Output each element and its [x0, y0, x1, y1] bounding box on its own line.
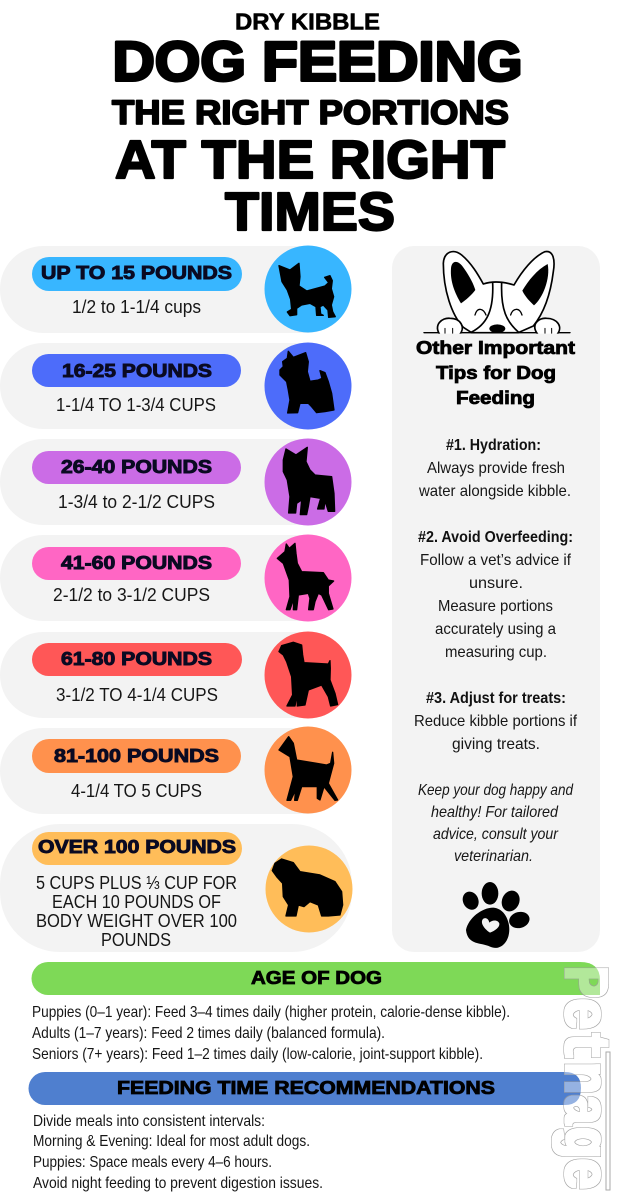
- text block: avoid overfeeding: Measure portions: [438, 598, 553, 615]
- title: THE RIGHT PORTIONS: [112, 94, 509, 132]
- panel: 41-60 pounds: [0, 534, 352, 622]
- text block: avoid overfeeding: [418, 529, 573, 661]
- text block: hydration: Always provide fresh: [427, 460, 565, 477]
- panel: up to 15 pounds: 1/2 to 1-1/4 cups: [72, 296, 201, 317]
- panel: over 100 pounds: EACH 10 POUNDS OF: [52, 891, 221, 912]
- text block: avoid overfeeding: accurately using a: [435, 621, 556, 638]
- text block: adjust for treats: [414, 690, 578, 753]
- panel: up to 15 pounds: [0, 246, 352, 333]
- panel: 61-80 pounds: 61-80 POUNDS: [61, 649, 212, 669]
- text block: age guidance: Seniors (7+ years): Feed 1–2 times daily (low-calorie, joint-support kibble).: [32, 1046, 483, 1063]
- panel: up to 15 pounds: UP TO 15 POUNDS: [41, 263, 232, 283]
- text block: hydration: water alongside kibble.: [418, 483, 571, 500]
- banner: age of dog: [32, 962, 600, 995]
- panel: 26-40 pounds: 1-3/4 to 2-1/2 CUPS: [58, 491, 215, 512]
- banner: age of dog: AGE OF DOG: [251, 968, 382, 988]
- title: TIMES: [225, 182, 395, 242]
- panel: 61-80 pounds: 3-1/2 TO 4-1/4 CUPS: [56, 684, 218, 705]
- heading: tips: Tips for Dog: [436, 363, 556, 383]
- panel: over 100 pounds: [0, 824, 352, 952]
- text block: closing note: advice, consult your: [433, 826, 559, 843]
- panel: 81-100 pounds: [0, 726, 352, 814]
- text block: hydration: [418, 437, 571, 500]
- text block: adjust for treats: Reduce kibble portions if: [414, 713, 578, 730]
- text block: avoid overfeeding: #2. Avoid Overfeeding:: [418, 529, 573, 546]
- text block: age guidance: Adults (1–7 years): Feed 2 times daily (balanced formula).: [32, 1025, 385, 1042]
- text block: age guidance: [32, 1004, 510, 1063]
- banner: feeding time recommendations: [28, 1072, 581, 1105]
- title: DRY KIBBLE: [235, 9, 380, 35]
- title: DOG FEEDING: [112, 30, 522, 92]
- text block: age guidance: Puppies (0–1 year): Feed 3–4 times daily (higher protein, calorie-dense kibble).: [32, 1004, 510, 1021]
- panel: over 100 pounds: POUNDS: [101, 929, 171, 950]
- panel: 41-60 pounds: 2-1/2 to 3-1/2 CUPS: [53, 584, 210, 605]
- title: AT THE RIGHT: [115, 130, 505, 190]
- panel: 26-40 pounds: 26-40 POUNDS: [61, 457, 212, 477]
- panel: 16-25 pounds: 1-1/4 TO 1-3/4 CUPS: [56, 394, 216, 415]
- text block: avoid overfeeding: unsure.: [469, 575, 523, 592]
- icon: peeking dog: [423, 251, 573, 337]
- panel: 81-100 pounds: 4-1/4 TO 5 CUPS: [71, 780, 202, 801]
- panel: over 100 pounds: BODY WEIGHT OVER 100: [36, 910, 237, 931]
- panel: 61-80 pounds: [0, 632, 352, 718]
- text block: hydration: #1. Hydration:: [446, 437, 541, 454]
- panel: 41-60 pounds: 41-60 POUNDS: [61, 553, 212, 573]
- text block: feeding times: [33, 1113, 323, 1192]
- text block: feeding times: Morning & Evening: Ideal for most adult dogs.: [33, 1133, 310, 1150]
- panel: over 100 pounds: OVER 100 POUNDS: [38, 837, 236, 857]
- banner: feeding time recommendations: FEEDING TIME RECOMMENDATIONS: [117, 1078, 495, 1098]
- panel: over 100 pounds: 5 CUPS PLUS ⅓ CUP FOR: [36, 872, 237, 893]
- text block: closing note: Keep your dog happy and: [418, 782, 574, 799]
- text block: adjust for treats: #3. Adjust for treats:: [426, 690, 566, 707]
- text block: adjust for treats: giving treats.: [452, 736, 540, 753]
- panel: 81-100 pounds: 81-100 POUNDS: [54, 746, 219, 766]
- panel: 16-25 pounds: 16-25 POUNDS: [62, 361, 212, 381]
- text block: closing note: [418, 782, 574, 865]
- text block: closing note: healthy! For tailored: [431, 804, 559, 821]
- text block: feeding times: Avoid night feeding to prevent digestion issues.: [33, 1175, 323, 1192]
- icon: paw with heart: [460, 882, 531, 948]
- title: [112, 9, 522, 242]
- text block: avoid overfeeding: measuring cup.: [445, 644, 547, 661]
- text block: closing note: veterinarian.: [454, 848, 533, 865]
- heading: tips: [416, 338, 575, 408]
- text block: avoid overfeeding: Follow a vet’s advice if: [420, 552, 572, 569]
- panel: 16-25 pounds: [0, 342, 352, 430]
- text block: feeding times: Divide meals into consistent intervals:: [33, 1113, 265, 1130]
- panel: other important tips: [392, 246, 600, 952]
- heading: tips: Feeding: [456, 388, 535, 408]
- heading: tips: Other Important: [416, 338, 575, 358]
- text block: feeding times: Puppies: Space meals every 4–6 hours.: [33, 1154, 272, 1171]
- panel: 26-40 pounds: [0, 438, 352, 526]
